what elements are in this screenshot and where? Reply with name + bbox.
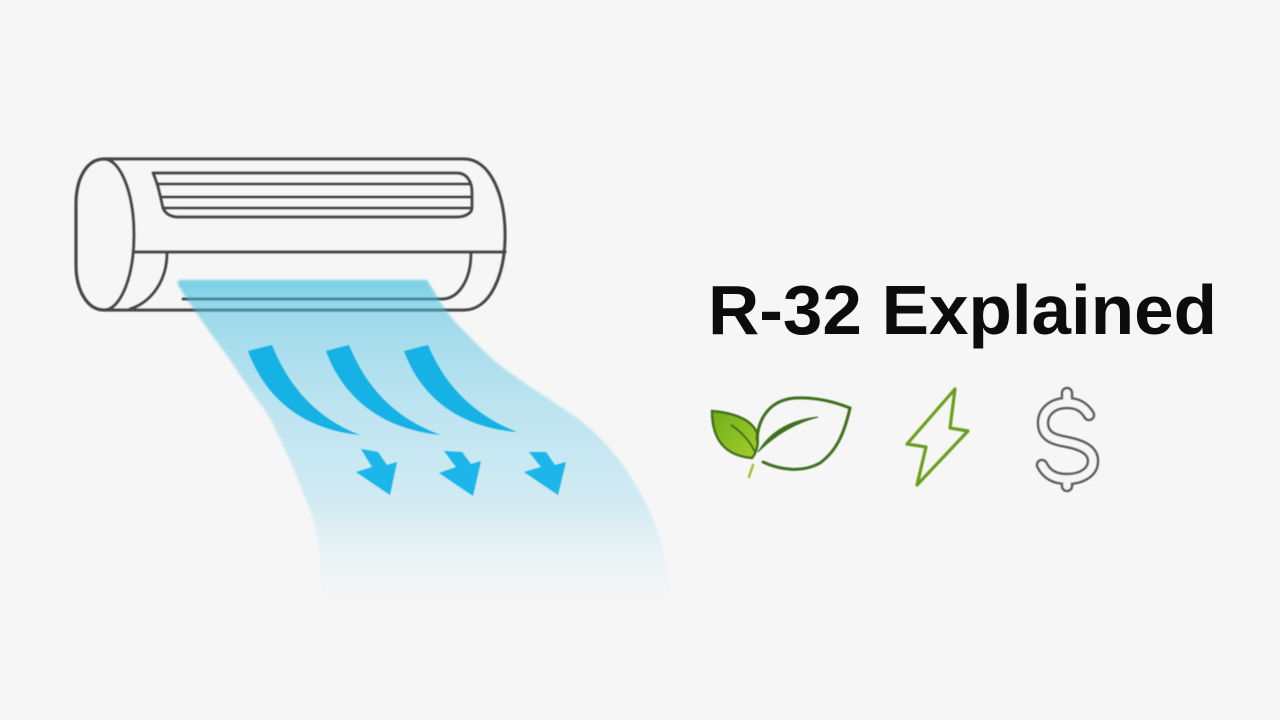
air vent louvres xyxy=(153,173,472,217)
stream 2 xyxy=(326,345,441,435)
down arrows xyxy=(356,449,566,496)
curved air streams xyxy=(248,345,517,435)
title: R-32 Explained xyxy=(708,271,1217,349)
icon: leaves xyxy=(712,398,850,477)
arrow 2 xyxy=(439,451,481,496)
arrow 3 xyxy=(524,452,566,495)
arrow 1 xyxy=(356,449,397,495)
icon: dollar sign xyxy=(1042,393,1093,486)
icon: lightning bolt xyxy=(907,389,968,485)
unit body outline xyxy=(104,159,505,310)
stream 3 xyxy=(404,345,517,432)
small filled leaf xyxy=(712,411,758,458)
cold air flow band xyxy=(178,280,671,605)
large outline leaf xyxy=(757,398,850,469)
stream 1 xyxy=(248,345,360,435)
air conditioner unit xyxy=(76,159,505,310)
lower panel lines xyxy=(130,252,505,309)
unit end cap xyxy=(76,159,134,310)
